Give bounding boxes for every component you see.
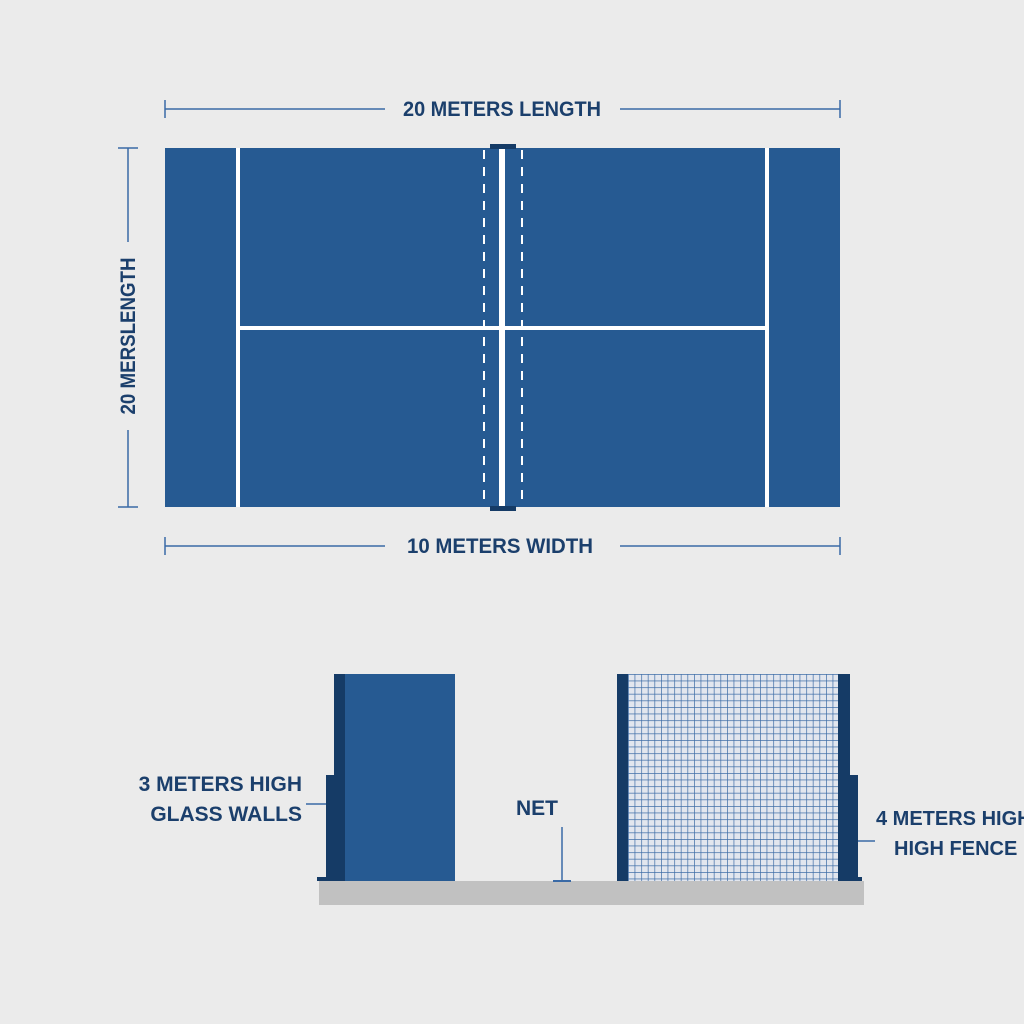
net posts [490,144,516,149]
label: fence: HIGH FENCE [894,838,1017,860]
ground [319,881,864,905]
dimension: top length: 20 METERS LENGTH [403,98,601,121]
label: fence [858,808,1024,860]
glass wall side view [317,674,455,881]
label: glass walls [139,773,326,826]
label: glass walls: 3 METERS HIGH [139,773,302,796]
court top view [165,144,840,511]
label: net: NET [516,797,558,820]
label: glass walls: GLASS WALLS [150,803,302,826]
dimension: left side: 20 MERSLENGTH [117,258,140,414]
label: net [516,797,571,881]
fence side view [617,674,862,881]
dimension: bottom width: 10 METERS WIDTH [407,535,593,558]
